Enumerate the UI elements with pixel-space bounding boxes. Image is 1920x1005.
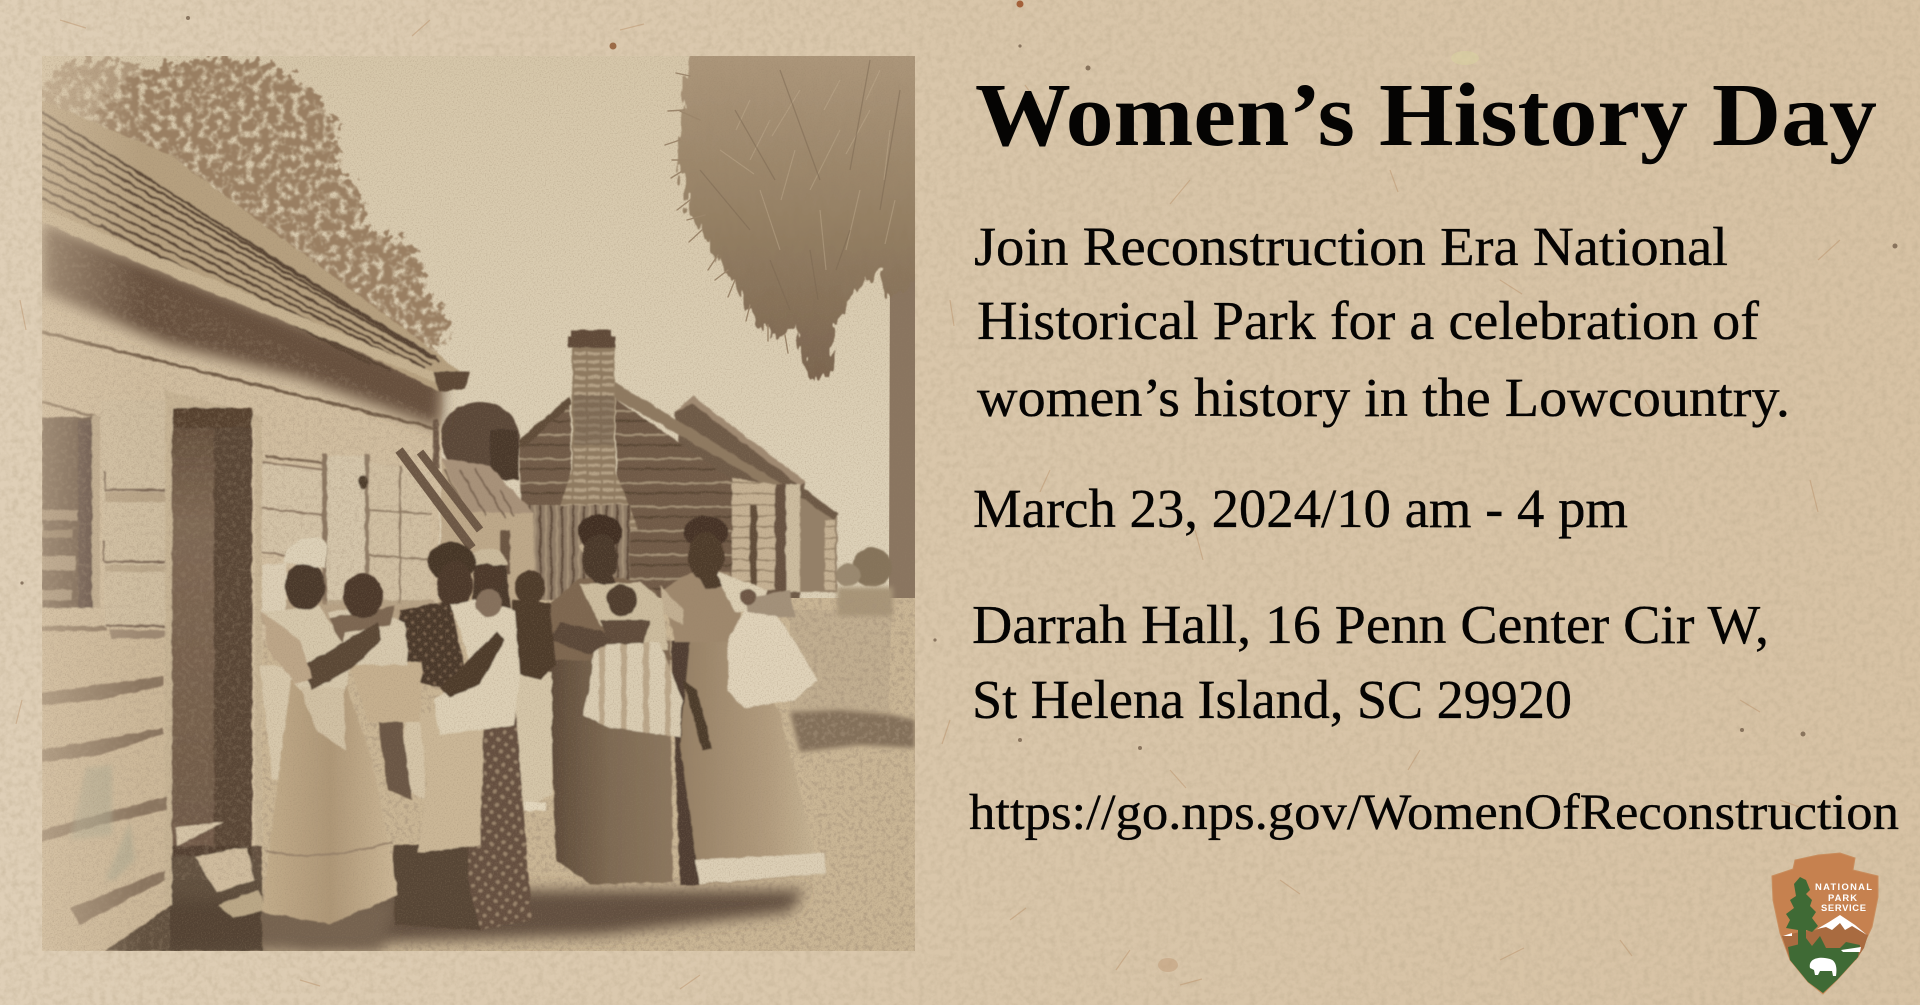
- sky: [82, 56, 890, 598]
- ground: [100, 587, 915, 951]
- woman 5: [660, 516, 826, 885]
- web link: https://go.nps.gov/WomenOfReconstruction: [969, 785, 1899, 841]
- photo grain: [42, 56, 915, 951]
- step boards: [176, 822, 224, 846]
- far trees on horizon: [835, 547, 892, 587]
- palm crown: [665, 50, 925, 384]
- faded green stain on boards: [70, 765, 135, 880]
- women and children group: [260, 514, 826, 930]
- intro paragraph: [974, 216, 1790, 428]
- date and time: March 23, 2024/10 am - 4 pm: [973, 478, 1628, 539]
- icon: National Park Service arrowhead: PARK: [1828, 892, 1857, 903]
- icon: National Park Service arrowhead: [1772, 853, 1878, 994]
- lower log lines: [42, 676, 167, 925]
- intro paragraph: Join Reconstruction Era National: [974, 216, 1728, 277]
- intro paragraph: women’s history in the Lowcountry.: [977, 367, 1790, 428]
- address: [972, 594, 1769, 730]
- icon: National Park Service arrowhead: NATIONAL: [1815, 881, 1872, 892]
- window: [42, 417, 92, 612]
- standing child: [508, 571, 556, 811]
- back cabins: [518, 382, 838, 600]
- shutter: [100, 400, 167, 628]
- backdrop boards behind group: [260, 665, 300, 780]
- photograph: women and children outside cabins: [30, 50, 925, 951]
- palm trunk: [889, 279, 915, 598]
- intro paragraph: Historical Park for a celebration of: [977, 290, 1760, 351]
- tree behind cabin: [30, 58, 447, 357]
- dark shrub behind cabin: [440, 402, 520, 480]
- title: Women’s History Day: [975, 66, 1877, 165]
- address: Darrah Hall, 16 Penn Center Cir W,: [972, 594, 1769, 655]
- ladder: [399, 450, 480, 548]
- address: St Helena Island, SC 29920: [972, 669, 1572, 730]
- left fade: [42, 56, 142, 951]
- woman 4: [548, 514, 682, 884]
- main cabin roof and walls: [42, 100, 470, 951]
- door frame and door: [165, 390, 262, 905]
- chimney: [552, 330, 638, 530]
- wall panels right of door: [262, 462, 325, 560]
- woman 2 and woman behind: [393, 542, 532, 930]
- woman 1 and baby: [262, 538, 422, 924]
- wall mottling: [42, 230, 440, 951]
- fence and lean-to: [441, 458, 630, 600]
- icon: National Park Service arrowhead: SERVICE: [1821, 902, 1866, 913]
